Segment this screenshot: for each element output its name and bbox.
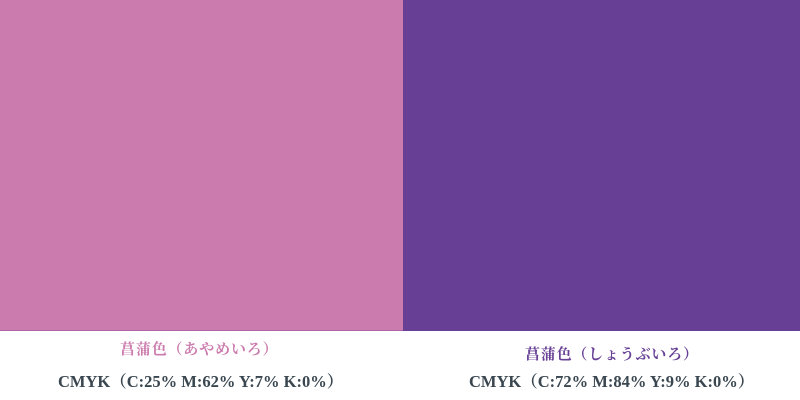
- heading: ayame colour name: 菖蒲色（あやめいろ）: [120, 342, 279, 358]
- heading: shoubu colour name: 菖蒲色（しょうぶいろ）: [525, 347, 699, 363]
- text: shoubu CMYK values: CMYK（C:72% M:84% Y:9% K:0%）: [469, 372, 754, 391]
- text: ayame CMYK values: CMYK（C:25% M:62% Y:7% K:0%）: [58, 372, 343, 391]
- panel: ayame swatch: [0, 0, 403, 331]
- panel: shoubu swatch: [403, 0, 800, 331]
